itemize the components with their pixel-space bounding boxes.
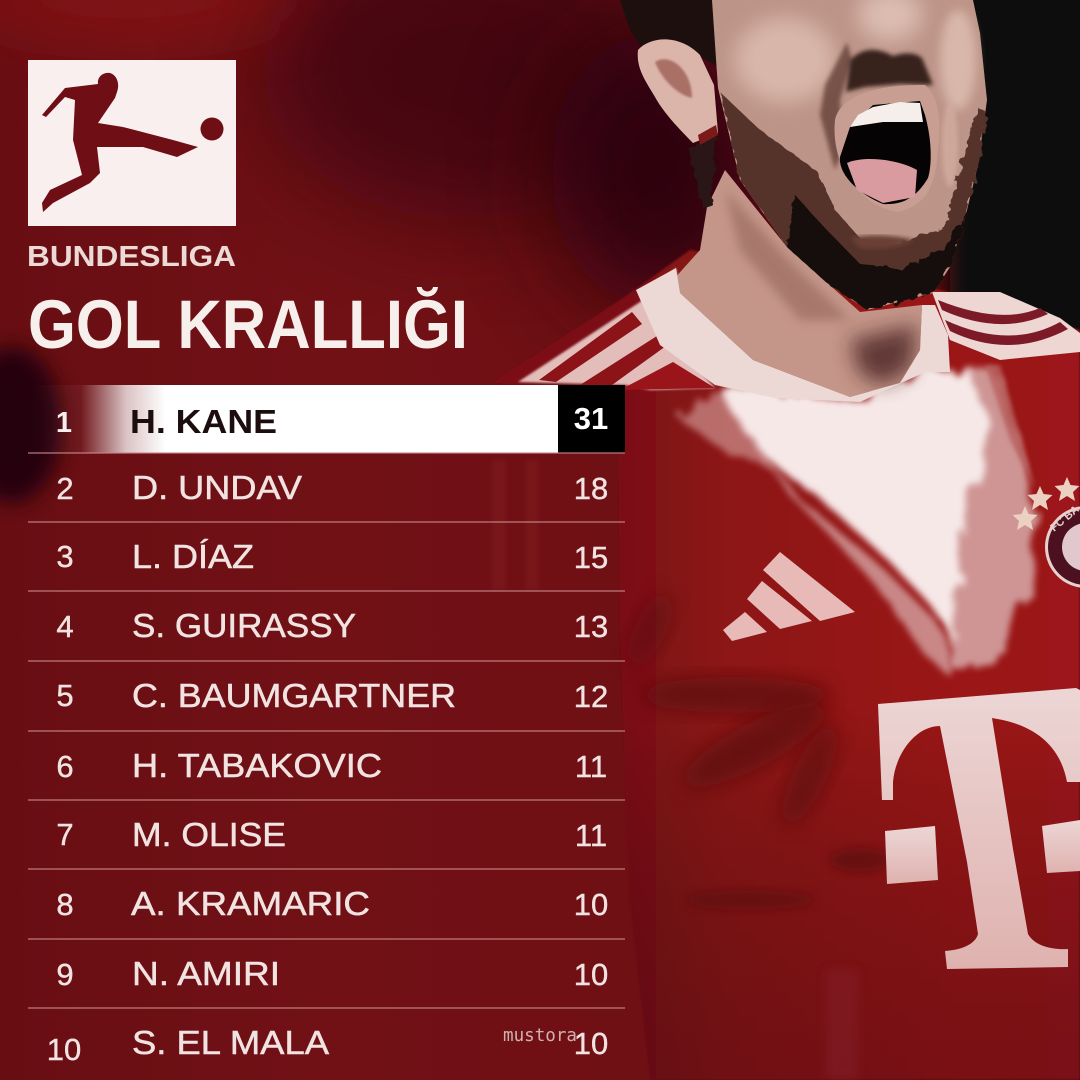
row 1 highlighted	[28, 385, 625, 453]
row 9	[28, 939, 625, 992]
stars	[1012, 477, 1080, 530]
ball	[200, 118, 224, 140]
row 7: 11	[575, 818, 607, 853]
row 5: C. BAUMGARTNER	[132, 677, 456, 714]
row 2: D. UNDAV	[132, 469, 302, 506]
beard	[720, 92, 986, 310]
leaderboard table	[28, 385, 625, 1067]
row 4: S. GUIRASSY	[132, 607, 356, 644]
row 7: M. OLISE	[132, 816, 286, 853]
telekom T logo	[878, 688, 1080, 969]
Bundesliga logo	[28, 60, 236, 226]
row 9: N. AMIRI	[132, 955, 280, 992]
row 2	[28, 453, 625, 506]
row 2: 18	[574, 471, 608, 506]
wordmark: BUNDESLIGA	[27, 241, 236, 273]
row 8	[28, 869, 625, 922]
row 1 highlighted: H. KANE	[130, 403, 277, 440]
row 10	[28, 1008, 625, 1067]
row 10: 10	[47, 1032, 81, 1067]
row 7	[28, 800, 625, 853]
collar	[636, 268, 950, 402]
tongue	[847, 159, 917, 203]
row 6: 11	[575, 749, 607, 784]
ear	[638, 39, 718, 145]
row 6	[28, 731, 625, 784]
row 5: 5	[56, 678, 74, 713]
club badge	[1045, 503, 1080, 588]
row 6: H. TABAKOVIC	[132, 747, 382, 784]
row 2: 2	[56, 471, 74, 506]
hair at nape	[688, 135, 716, 208]
adidas logo	[723, 552, 855, 641]
head and face	[712, 0, 987, 310]
open mouth	[835, 85, 939, 212]
nose and moustache shadow	[846, 50, 933, 92]
neck	[673, 170, 922, 397]
title: GOL KRALLIĞI	[28, 286, 468, 363]
row 8: A. KRAMARIC	[131, 885, 370, 922]
row 9: 10	[574, 957, 608, 992]
row 1 highlighted: 1	[56, 407, 72, 439]
row 1 highlighted: 31	[574, 401, 608, 436]
row 10: 10	[574, 1026, 608, 1061]
row 4: 13	[574, 609, 608, 644]
kicker silhouette	[42, 73, 198, 212]
row 3: 15	[574, 540, 608, 575]
player illustration	[492, 0, 1080, 1080]
row 8: 10	[574, 887, 608, 922]
row 9: 9	[56, 957, 74, 992]
jersey	[492, 250, 1080, 1080]
row 3	[28, 522, 625, 575]
row 7: 7	[56, 817, 74, 852]
row 6: 6	[56, 749, 74, 784]
white chest fade	[678, 365, 1035, 680]
row 3: L. DÍAZ	[132, 538, 254, 575]
row 4	[28, 591, 625, 644]
right shoulder stripes	[932, 292, 1080, 360]
row 3: 3	[56, 539, 74, 574]
row 4: 4	[56, 609, 74, 644]
watermark: mustora	[503, 1025, 577, 1046]
row 10: S. EL MALA	[132, 1024, 329, 1061]
left shoulder stripes	[518, 268, 715, 390]
hair	[620, 0, 716, 66]
row 5: 12	[574, 679, 608, 714]
row 8: 8	[56, 887, 74, 922]
upper teeth	[850, 102, 923, 127]
row 5	[28, 661, 625, 714]
